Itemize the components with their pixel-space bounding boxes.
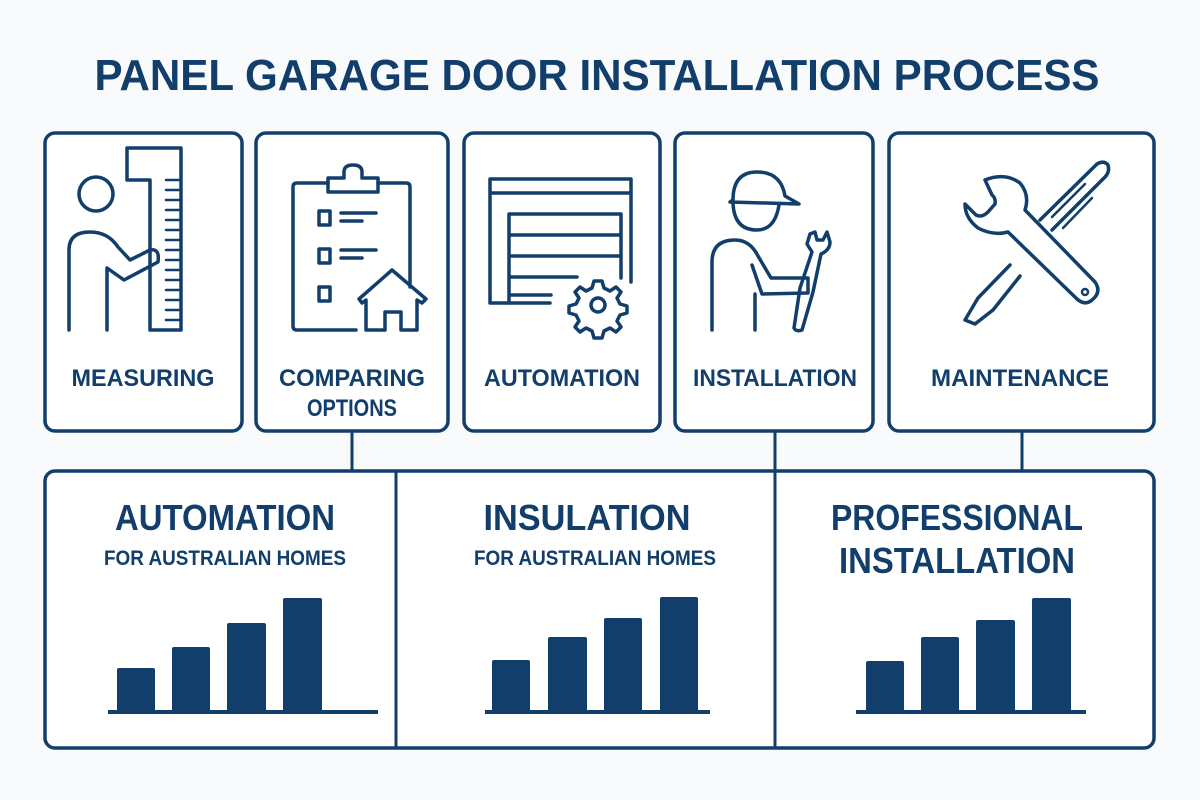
subheading: FOR AUSTRALIAN HOMES <box>104 547 346 570</box>
bar chart <box>856 598 1086 714</box>
bar chart <box>108 598 378 714</box>
label: automation: AUTOMATION <box>484 365 640 392</box>
heading: professional installation: PROFESSIONAL <box>831 497 1083 538</box>
section: insulation chart <box>474 497 716 714</box>
heading: automation: AUTOMATION <box>115 497 335 538</box>
panel: maintenance <box>889 133 1154 431</box>
label: comparing options <box>279 365 425 422</box>
icon: wrench and screwdriver <box>965 162 1109 324</box>
label: installation: INSTALLATION <box>693 365 857 392</box>
panel: installation <box>675 133 873 431</box>
icon: worker with wrench <box>712 172 830 331</box>
panel: measuring <box>45 133 242 431</box>
label: comparing options: OPTIONS <box>307 395 397 422</box>
panel: comparing options <box>256 133 448 431</box>
icon: garage door with gear <box>490 179 631 338</box>
label: measuring: MEASURING <box>72 365 214 392</box>
title: PANEL GARAGE DOOR INSTALLATION PROCESS <box>94 51 1100 100</box>
heading: insulation: INSULATION <box>484 497 690 538</box>
icon: person with ruler <box>69 148 181 330</box>
icon: clipboard house <box>293 165 426 330</box>
label: maintenance: MAINTENANCE <box>931 365 1109 392</box>
bottom panel <box>45 471 1154 748</box>
connectors <box>352 431 1022 471</box>
bar chart <box>485 597 710 714</box>
heading: professional installation <box>831 497 1083 581</box>
section: professional installation chart <box>831 497 1086 714</box>
label: comparing options: COMPARING <box>279 365 425 392</box>
subheading: FOR AUSTRALIAN HOMES <box>474 547 716 570</box>
panel: automation <box>464 133 660 431</box>
heading: professional installation: INSTALLATION <box>839 540 1075 581</box>
section: automation chart <box>104 497 378 714</box>
